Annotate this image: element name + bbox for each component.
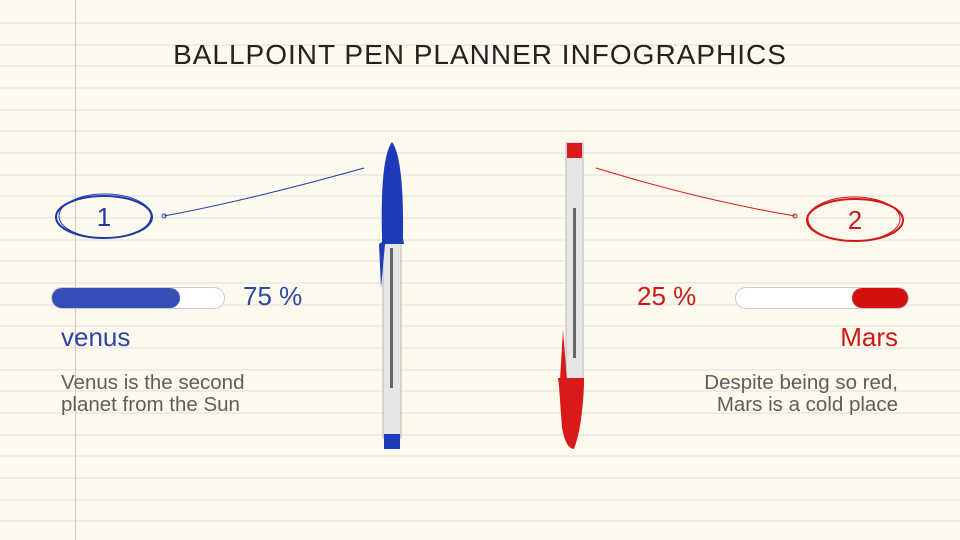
text: Mars description — [704, 371, 898, 416]
callout: 2: 2 — [848, 205, 862, 235]
text: Mars description: Mars is a cold place — [717, 393, 898, 416]
text: Venus description — [61, 371, 244, 416]
title: BALLPOINT PEN PLANNER INFOGRAPHICS — [173, 39, 787, 70]
icon: red pen — [558, 142, 584, 449]
percentage: 25: 25 % — [637, 281, 696, 311]
callout: 1: 1 — [97, 202, 111, 232]
progress bar: Venus — [51, 287, 225, 309]
label: Venus: venus — [61, 322, 130, 352]
callout: 1 — [55, 168, 364, 239]
callout: 2 — [596, 168, 904, 242]
label: Mars: Mars — [840, 322, 898, 352]
text: Venus description: Venus is the second — [61, 371, 244, 394]
text: Venus description: planet from the Sun — [61, 393, 240, 416]
icon: blue pen — [379, 142, 404, 449]
text: Mars description: Despite being so red, — [704, 371, 898, 394]
progress bar: Mars — [735, 287, 909, 309]
percentage: 75: 75 % — [243, 281, 302, 311]
